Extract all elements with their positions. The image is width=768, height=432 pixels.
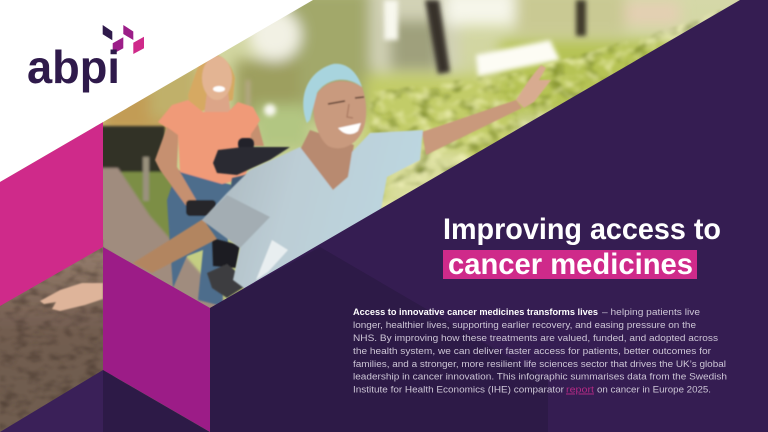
intro text block (353, 307, 727, 396)
intro text block: longer, healthier lives, supporting earlier recovery, and easing pressure on the (353, 320, 696, 331)
intro text block: on cancer in Europe 2025. (597, 384, 711, 396)
title line two: cancer medicines (448, 248, 693, 281)
intro text block: the health system, we can deliver faster access for patients, better outcomes for (353, 346, 712, 357)
white corner panel (0, 0, 313, 182)
logo wordmark: abpi (27, 41, 120, 93)
intro text block: report (566, 384, 594, 396)
title line one: Improving access to (443, 213, 721, 246)
panel: main purple (210, 0, 768, 432)
panel: darker purple facet (210, 247, 548, 432)
intro text block: NHS. By improving how these treatments are valued, funded, and adopted across (353, 333, 718, 344)
brick texture (0, 240, 103, 432)
intro text block: Institute for Health Economics (IHE) comparator (353, 384, 565, 396)
panel: lower centre dark purple (103, 370, 210, 432)
background foliage and sky (100, 0, 680, 210)
wheelchair armrest and seat (207, 138, 290, 298)
highlight bar (443, 250, 697, 279)
intro text block: leadership in cancer innovation. This infographic summarises data from the Swedish (353, 372, 727, 382)
logo mark squares (103, 25, 144, 54)
intro text block: families, and a stronger, more resilient life sciences sector that drives the UK’s global (353, 359, 726, 370)
panel: magenta parallelogram (103, 247, 210, 432)
title (443, 213, 721, 281)
garden: hedge, lawn and path (0, 126, 235, 432)
logo: abpi (27, 25, 144, 93)
woman with headscarf, arms outstretched (40, 64, 551, 311)
intro text block: – helping patients live (602, 307, 700, 318)
foliage detail (246, 0, 586, 120)
panel: pink parallelogram (0, 122, 103, 306)
young woman in coral t-shirt (155, 54, 264, 306)
hedge leaf texture (370, 10, 722, 208)
panel: lower left purple (0, 370, 103, 432)
intro text block: Access to innovative cancer medicines transforms lives (353, 307, 598, 318)
